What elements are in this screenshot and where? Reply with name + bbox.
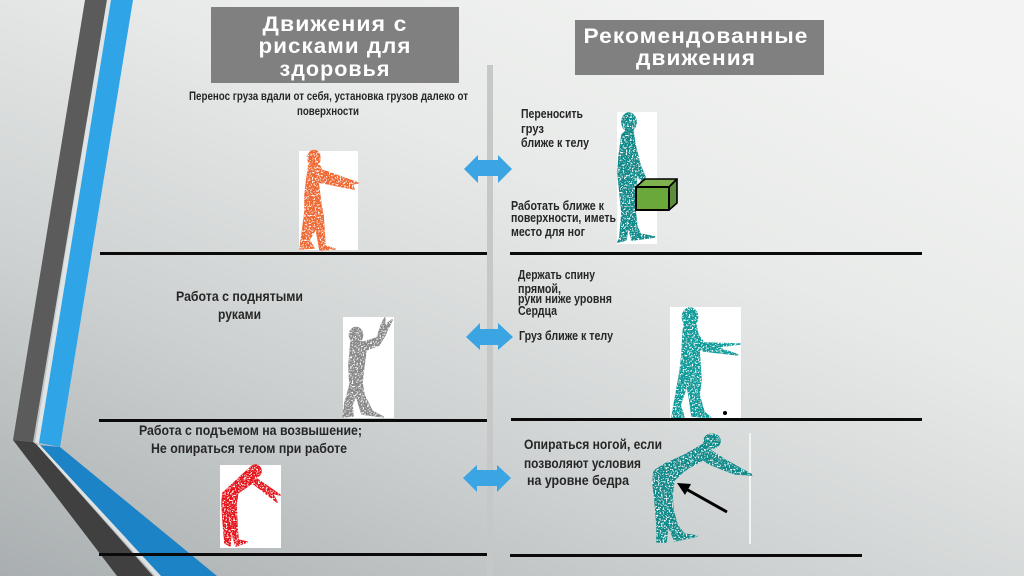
arrow: double blue row 2 — [466, 323, 513, 350]
text: keep back straight — [518, 268, 612, 318]
heading: recommended movements: Рекомендованные — [584, 25, 808, 48]
figure: gray person with raised arms — [343, 317, 394, 418]
text: keep back straight: Сердца — [518, 304, 558, 318]
text: work with raised arms: руками — [218, 306, 261, 322]
heading: risky movements: Движения с — [262, 13, 408, 36]
decorative ribbon stripes — [13, 0, 217, 576]
text: work with raised arms — [176, 288, 303, 322]
arrow: black pointer to thigh — [677, 483, 727, 512]
text: lean with leg: на уровне бедра — [527, 472, 629, 488]
heading: risky movements: здоровья — [280, 58, 390, 81]
heading: recommended movements — [575, 20, 824, 75]
figure: teal person arms forward — [670, 307, 741, 420]
text: keep back straight: Держать спину — [518, 268, 595, 282]
text: lean with leg: позволяют условия — [524, 455, 641, 471]
text: carry load closer: Переносить — [521, 107, 583, 121]
text: carrying load far from body — [189, 91, 468, 118]
text: carry load closer: ближе к телу — [521, 136, 589, 150]
row 2 lines — [99, 418, 922, 422]
row 3 lines — [99, 553, 862, 557]
text: carrying load far from body: Перенос груза вдали от себя, установка грузов далеко от — [189, 91, 468, 103]
text: work closer to surface: Работать ближе к — [511, 199, 605, 213]
heading: risky movements: рисками для — [258, 35, 412, 58]
text: lean with leg: Опираться ногой, если — [524, 436, 662, 452]
figure: teal person carrying green box — [617, 112, 677, 244]
icon: black dot — [723, 411, 727, 415]
text: carry load closer: груз — [521, 122, 544, 136]
text: work closer to surface: место для ног — [511, 225, 585, 239]
white vertical surface line — [749, 433, 751, 544]
text: lean with leg — [524, 436, 662, 488]
text: work with lift to elevation: Не опираться телом при работе — [151, 440, 347, 456]
arrow: double blue row 1 — [464, 155, 512, 183]
text: work with lift to elevation — [139, 422, 362, 456]
arrow: double blue row 3 — [463, 465, 511, 492]
text: work with raised arms: Работа с поднятыми — [176, 288, 303, 304]
text: work closer to surface — [511, 199, 616, 239]
heading: risky movements — [211, 7, 459, 83]
figure: orange person with arms extended — [299, 150, 358, 250]
figure: teal person bending with arrow — [653, 434, 752, 542]
text: keep back straight: руки ниже уровня — [518, 292, 612, 306]
row 1 lines — [100, 252, 922, 255]
heading: recommended movements: движения — [636, 47, 756, 70]
icon: green box — [636, 179, 677, 210]
text: work closer to surface: поверхности, иметь — [511, 211, 616, 225]
text: keep back straight: прямой, — [518, 282, 561, 296]
text: carry load closer — [521, 107, 589, 150]
figure: red person bending — [220, 465, 281, 548]
text: work with lift to elevation: Работа с подъемом на возвышение; — [139, 422, 362, 438]
central vertical divider — [487, 65, 493, 576]
text: load closer to body: Груз ближе к телу — [519, 329, 613, 343]
text: carrying load far from body: поверхности — [297, 106, 359, 118]
